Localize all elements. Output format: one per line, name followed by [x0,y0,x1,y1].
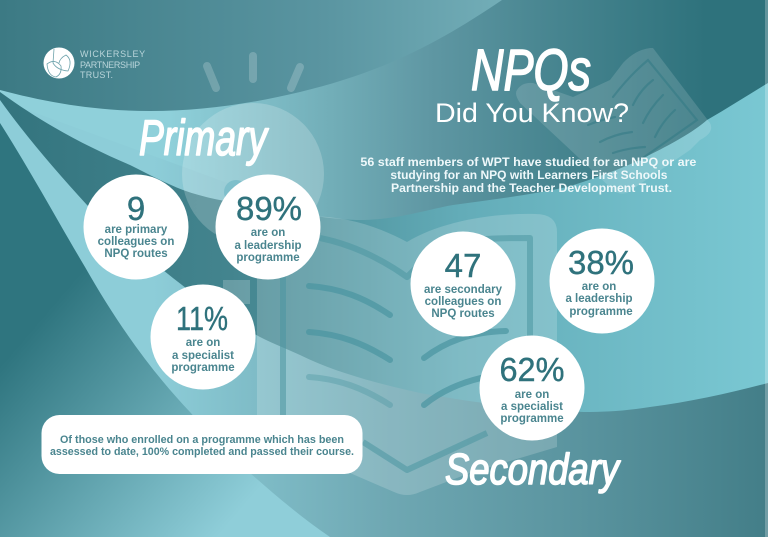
stat: 47 secondary colleagues: 47 [445,247,481,284]
heading: Primary: Primary [139,110,269,166]
decorative large open book [257,214,557,495]
stat: 11% specialist: 11% [176,300,228,337]
stat: 9 primary colleagues: are primary [105,224,168,236]
stat: 62% specialist: are on [515,389,549,401]
stat: 47 secondary colleagues: NPQ routes [431,308,495,320]
stat: 11% specialist [150,284,256,390]
logo wordmark: WICKERSLEY [80,49,145,59]
small book lines [588,60,697,160]
background: bottom left triangle [0,123,330,537]
stat: 9 primary colleagues: NPQ routes [104,248,168,260]
stat: 89% leadership: programme [236,252,300,264]
heading: Secondary: Secondary [445,445,621,494]
small book body [516,48,711,194]
lightbulb filament [224,180,248,204]
stat: 38% leadership: 38% [568,244,634,281]
stat: 38% leadership: are on [582,281,616,293]
stat: 62% specialist: programme [500,413,564,425]
logo wordmark: TRUST. [80,70,113,80]
heading: Did You Know?: Did You Know? [435,98,629,128]
decorative small open book [516,48,711,194]
lightbulb neck [223,280,250,304]
logo: Wickersley Partnership Trust [44,48,148,80]
stat: 47 secondary colleagues: colleagues on [425,296,501,308]
lightbulb glow [182,103,324,245]
logo wordmark: PARTNERSHIP [80,60,140,70]
stat: 89% leadership: are on [251,227,285,239]
stat: 62% specialist [480,336,584,440]
lightbulb rays [207,56,300,88]
stat: 9 primary colleagues [84,174,188,280]
stat: 11% specialist: programme [171,362,235,374]
intro text: 56 staff members of WPT have studied for an NPQ or are [360,157,696,169]
stat: 9 primary colleagues: 9 [127,190,145,227]
callout: completion [42,415,362,474]
stat: 62% specialist: 62% [500,351,564,388]
callout: completion: assessed to date, 100% completed and passed their course. [50,446,354,458]
stat: 38% leadership: a leadership [565,293,633,305]
stat: 89% leadership: 89% [236,190,302,227]
book text lines [309,286,506,405]
stat: 47 secondary colleagues: are secondary [424,284,503,296]
stat: 11% specialist: are on [186,337,220,349]
logo mark [44,48,74,78]
stat: 9 primary colleagues: colleagues on [98,236,174,248]
book body [257,214,557,495]
background: top dark band [0,0,502,111]
stat: 62% specialist: a specialist [501,401,563,413]
heading: NPQs: NPQs [471,38,591,103]
callout: completion: Of those who enrolled on a programme which has been [60,434,344,446]
stat: 89% leadership [216,174,320,280]
book pages outline [283,238,530,470]
intro text: Partnership and the Teacher Development Trust. [391,183,672,195]
right edge strip [765,0,768,537]
stat: 89% leadership: a leadership [234,240,302,252]
background: mid wedge and right panel [0,83,768,412]
stat: 47 secondary colleagues [410,232,516,336]
stat: 11% specialist: a specialist [172,350,234,362]
stat: 38% leadership [550,228,654,334]
intro text: studying for an NPQ with Learners First Schools [390,170,667,182]
decorative large lightbulb [182,56,324,304]
stat: 38% leadership: programme [569,306,633,318]
